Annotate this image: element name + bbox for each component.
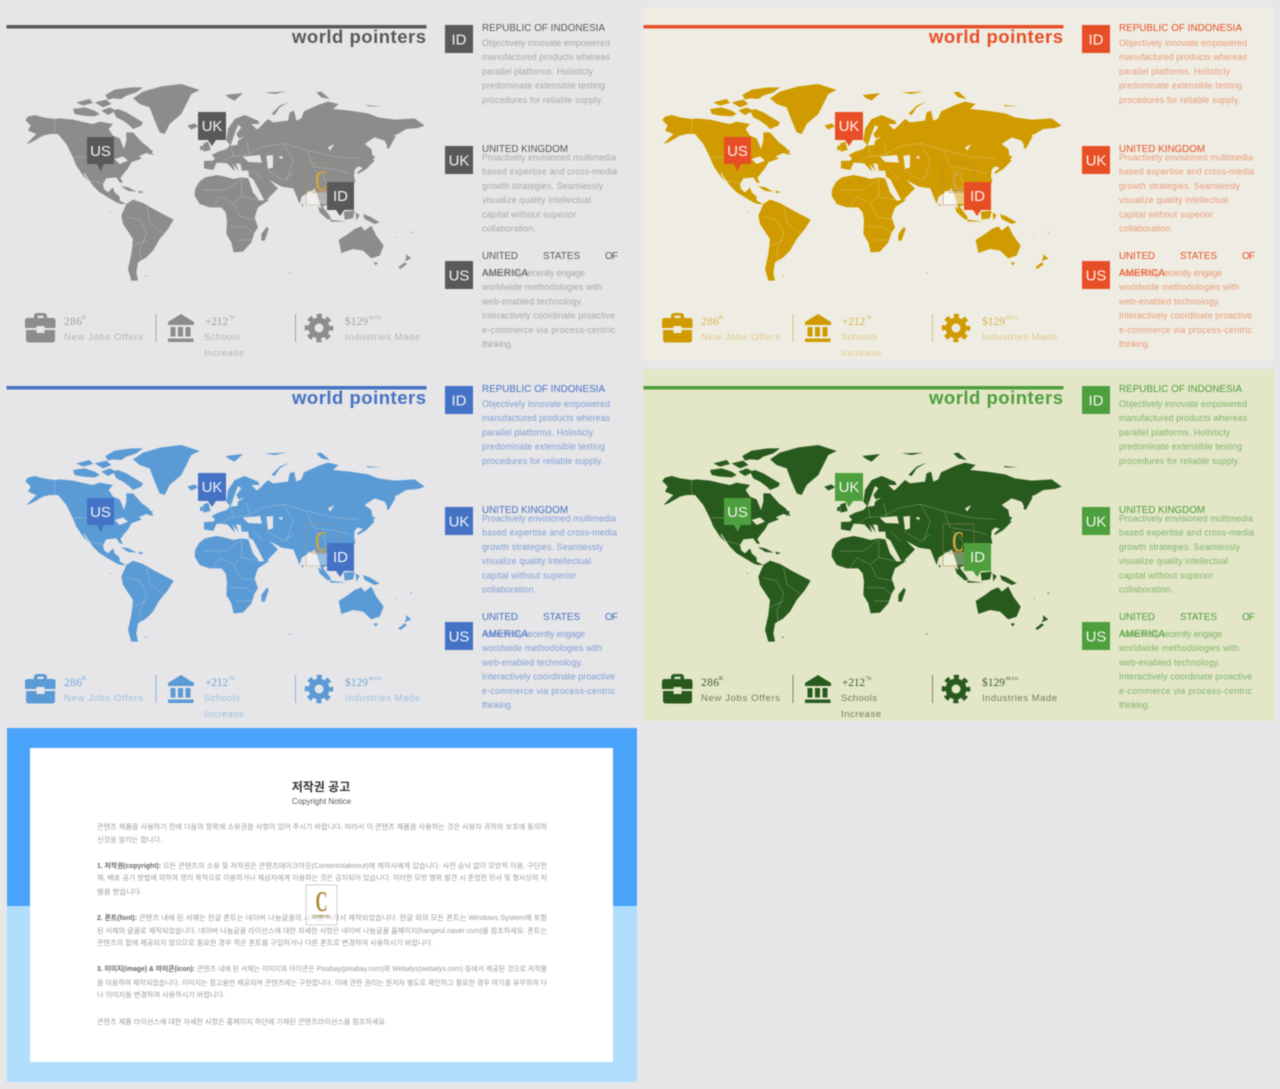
marker: UK: UK <box>839 479 859 496</box>
country block: United States: Assertively recently engage <box>1119 268 1222 278</box>
country block: Indonesia: ID <box>1088 32 1104 48</box>
marker: US <box>724 498 751 532</box>
statistic: schools <box>805 675 881 720</box>
marker: US: US <box>90 143 111 160</box>
world map <box>25 84 425 281</box>
country block: Indonesia: procedures for reliable supply. <box>482 95 603 105</box>
closing line: 콘텐츠 제품 라이선스에 대한 자세한 사항은 홈페이지 하단에 기재된 콘텐츠라이선스를 참조하세요. <box>97 1017 387 1026</box>
country block: United States: US <box>449 268 469 284</box>
statistic: new jobs <box>662 313 780 343</box>
marker: US <box>87 498 114 532</box>
marker: UK: UK <box>202 118 222 135</box>
country block: United States: e-commerce via process-centric <box>482 686 616 696</box>
country block: United States: e-commerce via process-centric <box>1119 325 1253 335</box>
country block: United States: thinking. <box>482 339 513 349</box>
statistic: new jobs: K <box>82 314 87 321</box>
statistic: schools: Increase <box>841 348 881 359</box>
country block: Indonesia <box>1082 384 1248 466</box>
marker: ID: ID <box>333 549 348 566</box>
watermark <box>943 163 974 205</box>
statistic: industries: mio <box>1006 314 1018 321</box>
country block: United Kingdom: Proactively envisioned multimedia <box>482 514 616 524</box>
country block: United Kingdom <box>1082 505 1254 594</box>
country block: Indonesia: REPUBLIC OF INDONESIA <box>482 384 605 395</box>
country block: Indonesia: parallel platforms. Holisticly <box>1119 66 1231 76</box>
panel: copyright notice <box>7 728 637 1082</box>
clause 1: copyright: 벌을 받습니다. <box>97 887 142 896</box>
statistic: new jobs: New Jobs Offers <box>701 693 780 704</box>
country block: United States: OF <box>605 251 618 262</box>
statistic: schools: % <box>229 675 235 682</box>
statistic: industries <box>944 314 1057 343</box>
country block: United Kingdom: growth strategies. Seamlessly <box>1119 542 1241 552</box>
country block: United Kingdom: capital without superior <box>1119 570 1213 580</box>
statistic: industries: $129 <box>345 315 368 328</box>
country block: Indonesia: Objectively innovate empowered <box>482 399 610 409</box>
marker: UK: UK <box>839 118 859 135</box>
country block: United Kingdom: Proactively envisioned multimedia <box>482 152 616 162</box>
statistic: schools: +212 <box>205 316 228 328</box>
statistic: industries: $129 <box>345 676 368 689</box>
marker: UK <box>835 473 863 507</box>
panel: blue world pointers <box>6 369 634 721</box>
country block: Indonesia: manufactured products whereas <box>482 413 611 423</box>
country block: United States: STATES <box>1180 612 1217 623</box>
marker: ID <box>327 543 354 577</box>
country block: United States: worldwide methodologies with <box>481 643 602 653</box>
statistic: industries: mio <box>369 314 381 321</box>
statistic: new jobs: 286 <box>701 677 719 689</box>
watermark: C <box>315 526 327 558</box>
country block: Indonesia: REPUBLIC OF INDONESIA <box>1119 384 1242 395</box>
country block: United States: AMERICA <box>1119 268 1165 279</box>
country block: United States: UNITED <box>482 251 518 262</box>
statistic: schools: % <box>866 314 872 321</box>
marker: UK <box>198 473 226 507</box>
statistic: schools: % <box>229 314 235 321</box>
statistic: schools: Schools <box>841 693 877 704</box>
country block: Indonesia: predominate extensible testing <box>482 442 605 452</box>
panel: green world pointers <box>643 369 1274 721</box>
country block: United Kingdom: growth strategies. Seamlessly <box>1119 181 1241 191</box>
clause 1: copyright: 모든 콘텐츠의 소유 및 저작권은 콘텐츠테이크아웃(Contentstakeout)에 제작사에게 있습니다. 사전 승낙 없이 모방적 이용, 구단전 <box>163 861 547 870</box>
marker: US: US <box>90 504 111 521</box>
statistic: new jobs: 286 <box>64 677 82 689</box>
watermark: CONTENTS <box>311 550 327 555</box>
country block: United Kingdom: based expertise and cross-media <box>482 167 617 177</box>
country block: United Kingdom: collaboration. <box>482 224 536 234</box>
country block: Indonesia: predominate extensible testing <box>1119 442 1242 452</box>
country block: United States: thinking. <box>482 700 513 710</box>
country block: United Kingdom: UK <box>449 152 469 170</box>
country block: United States: STATES <box>543 612 580 623</box>
copyright intro: 콘텐츠 제품을 사용하기 전에 다음의 항목에 소유권을 사항이 있어 주시기 바랍니다. 따라서 이 콘텐츠 제품을 사용하는 것은 사용자 귀하의 보호에 동의하 <box>97 822 548 831</box>
country block: United States: web-enabled technology. <box>1118 296 1220 306</box>
clause 3: image and icon <box>97 964 548 999</box>
clause 3: image and icon: 을 이용하여 제작되었습니다. 이미지는 참고용만 제공되며 콘텐츠에는 구현합니다. 이에 관한 권리는 원저자 별도로 확인하고 필요한 경우 여기를 유무하여 다 <box>97 978 548 987</box>
title bar <box>644 386 1064 408</box>
country block: Indonesia: REPUBLIC OF INDONESIA <box>1119 23 1242 34</box>
panel: grey world pointers <box>6 8 634 360</box>
country block: United Kingdom: visualize quality intellectual <box>482 556 591 566</box>
country block: United Kingdom: collaboration. <box>1119 584 1173 594</box>
copyright heading <box>292 779 352 806</box>
country block: United States: STATES <box>1180 251 1217 262</box>
statistic: industries: Industries Made <box>345 693 420 704</box>
country block: Indonesia: ID <box>452 392 467 410</box>
marker: US <box>724 137 751 171</box>
clause 1: copyright: 1. 저작권(copyright): <box>97 861 161 870</box>
country block: Indonesia: parallel platforms. Holisticly <box>1119 428 1231 438</box>
country block: Indonesia: procedures for reliable supply. <box>1119 456 1240 466</box>
country block: Indonesia: predominate extensible testing <box>482 81 605 91</box>
country block: United Kingdom <box>445 144 617 234</box>
country block: United States: web-enabled technology. <box>481 296 583 306</box>
clause 3: image and icon: 나 이미지를 변경하여 사용하시기 바랍니다. <box>97 990 225 999</box>
country block: United States: OF <box>1242 612 1255 623</box>
clause 2: font: 된 서체의 글꼴로 제작되었습니다. 네이버 나눔글꼴 라이선스에 대한 자세한 사항은 네이버 나눔글꼴 홈페이지(hangeul.naver.com)를 참조하세요. 폰트는 <box>97 926 548 935</box>
watermark: C <box>952 165 964 197</box>
statistic: new jobs <box>662 674 780 704</box>
country block: United Kingdom: UK <box>1086 152 1106 170</box>
clause 1: copyright <box>97 861 547 896</box>
watermark <box>306 163 337 205</box>
country block: Indonesia: ID <box>452 32 467 48</box>
statistic: schools: Schools <box>204 693 240 704</box>
country block: Indonesia: parallel platforms. Holisticly <box>482 66 594 76</box>
marker: UK <box>198 112 226 146</box>
country block: Indonesia: ID <box>1088 392 1104 410</box>
country block: United States: Interactively coordinate proactive <box>1119 672 1252 682</box>
copyright intro <box>97 822 548 844</box>
country block: United Kingdom: UNITED KINGDOM <box>482 144 568 155</box>
country block: Indonesia: manufactured products whereas <box>1119 413 1248 423</box>
country block: United Kingdom <box>445 505 617 594</box>
country block: United States: US <box>449 628 469 646</box>
country block: United States: UNITED <box>1119 612 1155 623</box>
statistic: new jobs <box>25 674 143 704</box>
statistic: schools: +212 <box>842 316 865 328</box>
marker: UK <box>835 112 863 146</box>
statistic: new jobs <box>25 313 143 343</box>
marker: ID: ID <box>970 549 985 566</box>
country block: United States: AMERICA <box>1119 629 1165 640</box>
country block: United States: UNITED <box>482 612 518 623</box>
country block: United States: OF <box>605 612 618 623</box>
statistic: schools: % <box>866 675 872 682</box>
country block: United Kingdom: UNITED KINGDOM <box>1119 144 1205 155</box>
statistic: schools: Schools <box>204 332 240 343</box>
country block: United States: Assertively recently engage <box>1119 629 1222 639</box>
country block: Indonesia: REPUBLIC OF INDONESIA <box>482 23 605 34</box>
watermark: C <box>952 526 964 558</box>
country block: Indonesia: parallel platforms. Holisticly <box>482 428 594 438</box>
watermark: CONTENTS <box>311 189 327 194</box>
country block: United States: Assertively recently engage <box>482 268 585 278</box>
title bar: world pointers <box>291 26 426 47</box>
statistic: schools: +212 <box>205 677 228 689</box>
statistic: industries: Industries Made <box>982 693 1057 704</box>
statistic: industries: $129 <box>982 676 1005 689</box>
country block: United Kingdom: based expertise and cross-media <box>1119 528 1254 538</box>
world map <box>662 84 1062 281</box>
country block: United Kingdom: Proactively envisioned multimedia <box>1119 514 1253 524</box>
country block: United States <box>445 612 618 710</box>
title bar: world pointers <box>928 387 1063 408</box>
country block: Indonesia: predominate extensible testing <box>1119 81 1242 91</box>
marker: UK: UK <box>202 479 222 496</box>
statistic: industries <box>944 675 1057 704</box>
clause 3: image and icon: 3. 이미지(image) & 아이콘(icon): <box>97 964 195 973</box>
country block: United Kingdom: capital without superior <box>1119 210 1213 220</box>
country block: United States: worldwide methodologies with <box>1118 643 1239 653</box>
statistic: schools <box>168 314 244 359</box>
world map <box>662 445 1062 642</box>
statistic: industries: Industries Made <box>345 332 420 343</box>
statistic: industries: mio <box>1006 675 1018 682</box>
statistic: new jobs: 286 <box>701 316 719 328</box>
country block: United Kingdom: capital without superior <box>482 570 576 580</box>
country block: Indonesia <box>1082 23 1248 105</box>
copyright heading: 저작권 공고 <box>292 779 350 794</box>
statistic: schools <box>168 675 244 720</box>
country block: Indonesia <box>445 384 611 466</box>
country block: United States <box>445 251 618 349</box>
country block: United Kingdom: based expertise and cross-media <box>1119 167 1254 177</box>
country block: United States: STATES <box>543 251 580 262</box>
country block: United Kingdom: capital without superior <box>482 210 576 220</box>
country block: United States: thinking. <box>1119 339 1150 349</box>
country block: United Kingdom: Proactively envisioned multimedia <box>1119 152 1253 162</box>
marker: US <box>87 137 114 171</box>
statistic: new jobs: New Jobs Offers <box>701 332 780 343</box>
watermark: CONTENTS <box>312 914 330 919</box>
country block: United Kingdom: growth strategies. Seamlessly <box>482 542 604 552</box>
statistic: new jobs: New Jobs Offers <box>64 693 143 704</box>
country block: United States <box>1082 612 1255 710</box>
clause 2: font: 2. 폰트(font): <box>97 914 137 922</box>
title bar <box>6 386 426 408</box>
country block: United States: UNITED <box>1119 251 1155 262</box>
country block: United States: web-enabled technology. <box>1118 657 1220 667</box>
country block: United States: thinking. <box>1119 700 1150 710</box>
country block: United States: web-enabled technology. <box>481 657 583 667</box>
country block: United States: e-commerce via process-centric <box>482 325 616 335</box>
watermark: CONTENTS <box>948 189 964 194</box>
country block: United Kingdom: visualize quality intellectual <box>1119 195 1228 205</box>
country block: United Kingdom: UNITED KINGDOM <box>1119 505 1205 516</box>
statistic: new jobs: K <box>719 314 724 321</box>
statistic: schools: Schools <box>841 332 877 343</box>
clause 2: font: 콘텐츠의 합에 제공되지 않으므로 필요한 경우 적은 폰트를 구입하거나 다른 폰트로 변경하여 사용하시기 바랍니다. <box>97 938 433 947</box>
clause 2: font <box>97 913 548 947</box>
title bar: world pointers <box>291 387 426 408</box>
marker: ID <box>964 182 991 216</box>
statistic: schools: Increase <box>204 348 244 359</box>
country block: United States: Interactively coordinate proactive <box>1119 310 1252 320</box>
watermark: C <box>315 165 327 197</box>
watermark <box>306 524 337 566</box>
marker: ID: ID <box>970 188 985 205</box>
country block: United States: AMERICA <box>482 268 528 279</box>
country block: Indonesia <box>445 23 611 105</box>
statistic: schools: Increase <box>204 709 244 720</box>
country block: Indonesia: Objectively innovate empowered <box>1119 399 1247 409</box>
clause 2: font: 콘텐츠 내에 된 서체는 한글 폰트는 네이버 나눔글꼴의 서체를 따라서 제작되었습니다. 한글 외의 모든 폰트는 Windows System에 포함 <box>139 913 548 922</box>
world map <box>25 445 425 642</box>
country block: United States: worldwide methodologies with <box>1118 282 1239 292</box>
country block: Indonesia: Objectively innovate empowered <box>482 38 610 48</box>
watermark <box>943 524 974 566</box>
marker: US: US <box>727 504 748 521</box>
country block: United States: OF <box>1242 251 1255 262</box>
statistic: new jobs: New Jobs Offers <box>64 332 143 343</box>
copyright heading: Copyright Notice <box>292 797 352 806</box>
statistic: industries: mio <box>369 675 381 682</box>
clause 1: copyright: 재, 배포 공기 방법에 의하여 영리 목적으로 이용하거나 제삼자에게 이용하는 것은 금지되어 있습니다. 이러한 모방 행위 발견 시 준엄한 민사 및 형사상의 처 <box>97 873 547 882</box>
title bar <box>644 25 1064 47</box>
country block: Indonesia: procedures for reliable supply. <box>1119 95 1240 105</box>
marker: ID: ID <box>333 188 348 205</box>
country block: United States: Interactively coordinate proactive <box>482 310 615 320</box>
statistic: industries: $129 <box>982 315 1005 328</box>
country block: United States <box>1082 251 1255 349</box>
country block: United Kingdom: UNITED KINGDOM <box>482 505 568 516</box>
statistic: industries <box>307 314 420 343</box>
title bar: world pointers <box>928 26 1063 47</box>
country block: United Kingdom: visualize quality intellectual <box>482 195 591 205</box>
country block: United Kingdom: growth strategies. Seamlessly <box>482 181 604 191</box>
country block: United Kingdom: UK <box>449 514 469 530</box>
country block: United States: US <box>1086 268 1106 284</box>
country block: United Kingdom: based expertise and cross-media <box>482 528 617 538</box>
watermark: CONTENTS <box>948 550 964 555</box>
country block: Indonesia: manufactured products whereas <box>482 52 611 62</box>
marker: ID <box>327 182 354 216</box>
statistic: schools: Increase <box>841 709 881 720</box>
country block: United States: US <box>1086 628 1106 646</box>
country block: United States: Interactively coordinate proactive <box>482 672 615 682</box>
statistic: new jobs: K <box>82 675 87 682</box>
marker: US: US <box>727 143 748 160</box>
country block: United Kingdom: collaboration. <box>482 584 536 594</box>
country block: Indonesia: Objectively innovate empowered <box>1119 38 1247 48</box>
country block: United Kingdom: visualize quality intellectual <box>1119 556 1228 566</box>
statistic: new jobs: K <box>719 675 724 682</box>
title bar <box>6 25 426 47</box>
country block: United Kingdom <box>1082 144 1254 234</box>
watermark: C <box>316 887 328 918</box>
statistic: schools: +212 <box>842 677 865 689</box>
marker: ID <box>964 543 991 577</box>
panel: orange world pointers <box>643 8 1274 360</box>
country block: Indonesia: manufactured products whereas <box>1119 52 1248 62</box>
country block: Indonesia: procedures for reliable supply. <box>482 456 603 466</box>
country block: United Kingdom: UK <box>1086 514 1106 530</box>
statistic: schools <box>805 314 881 359</box>
country block: United States: Assertively recently engage <box>482 629 585 639</box>
statistic: new jobs: 286 <box>64 316 82 328</box>
copyright intro: 신것을 알리는 합니다. <box>97 835 162 844</box>
country block: United States: e-commerce via process-centric <box>1119 686 1253 696</box>
watermark <box>306 885 337 925</box>
country block: United States: worldwide methodologies with <box>481 282 602 292</box>
clause 3: image and icon: 콘텐츠 내에 된 서체는 이미지와 아이콘은 Pixabay(pixabay.com)와 Webalys(webalys.com) 등에서 제공된 것으로 저작물 <box>197 964 548 973</box>
country block: United Kingdom: collaboration. <box>1119 224 1173 234</box>
country block: United States: AMERICA <box>482 629 528 640</box>
statistic: industries: Industries Made <box>982 332 1057 343</box>
statistic: industries <box>307 675 420 704</box>
